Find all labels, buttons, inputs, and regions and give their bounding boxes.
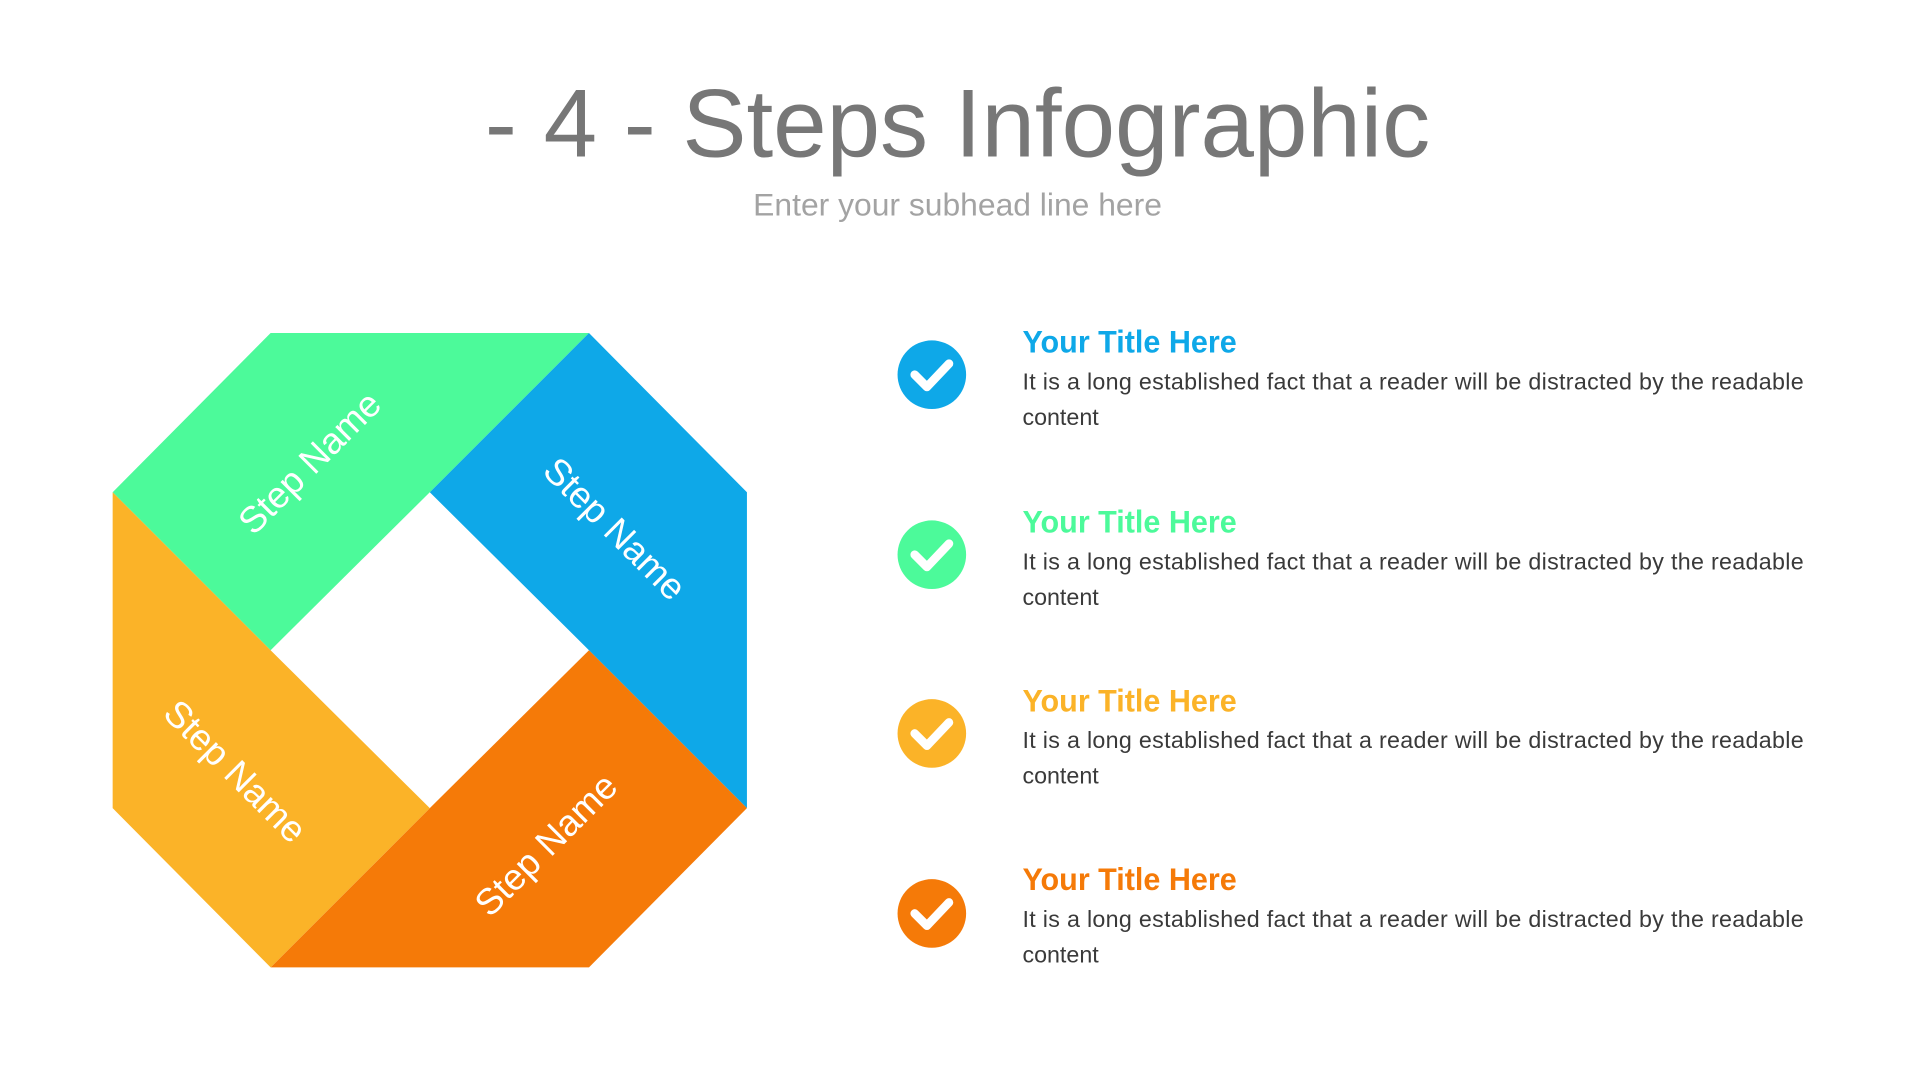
- item 4 text: content: [1022, 941, 1099, 967]
- item 2 text: content: [1022, 584, 1099, 610]
- item 4 text: It is a long established fact that a reader will be distracted by the readable: [1022, 906, 1804, 932]
- segment: green step: [113, 333, 589, 650]
- item 3 text: content: [1022, 763, 1099, 789]
- icon: green check: [898, 520, 966, 589]
- title: - 4 - Steps Infographic: [485, 70, 1430, 178]
- segment: yellow step: [113, 492, 430, 967]
- item 1 text: It is a long established fact that a reader will be distracted by the readable: [1022, 368, 1804, 394]
- segment: blue step: Step Name: [535, 449, 694, 608]
- item 1: [898, 324, 1804, 430]
- item 2: [898, 504, 1804, 610]
- octagon diagram: [113, 333, 747, 967]
- subtitle: Enter your subhead line here: [753, 187, 1162, 223]
- segment: green step: Step Name: [230, 383, 389, 542]
- item 2 text: It is a long established fact that a reader will be distracted by the readable: [1022, 548, 1804, 574]
- segment: yellow step: Step Name: [156, 692, 315, 851]
- item 3: [898, 682, 1804, 789]
- segment: blue step: [430, 333, 747, 808]
- icon: blue check: [898, 340, 966, 409]
- item 1 text: content: [1022, 404, 1099, 430]
- item 2 title: Your Title Here: [1022, 504, 1237, 540]
- icon: yellow check: [898, 699, 966, 768]
- item 3 title: Your Title Here: [1022, 682, 1237, 718]
- item 4: [898, 861, 1804, 967]
- item 4 title: Your Title Here: [1022, 861, 1237, 897]
- icon: orange check: [898, 879, 966, 948]
- segment: orange step: Step Name: [467, 765, 625, 924]
- item 3 text: It is a long established fact that a reader will be distracted by the readable: [1022, 727, 1804, 753]
- segment: orange step: [271, 650, 747, 967]
- item 1 title: Your Title Here: [1022, 324, 1237, 360]
